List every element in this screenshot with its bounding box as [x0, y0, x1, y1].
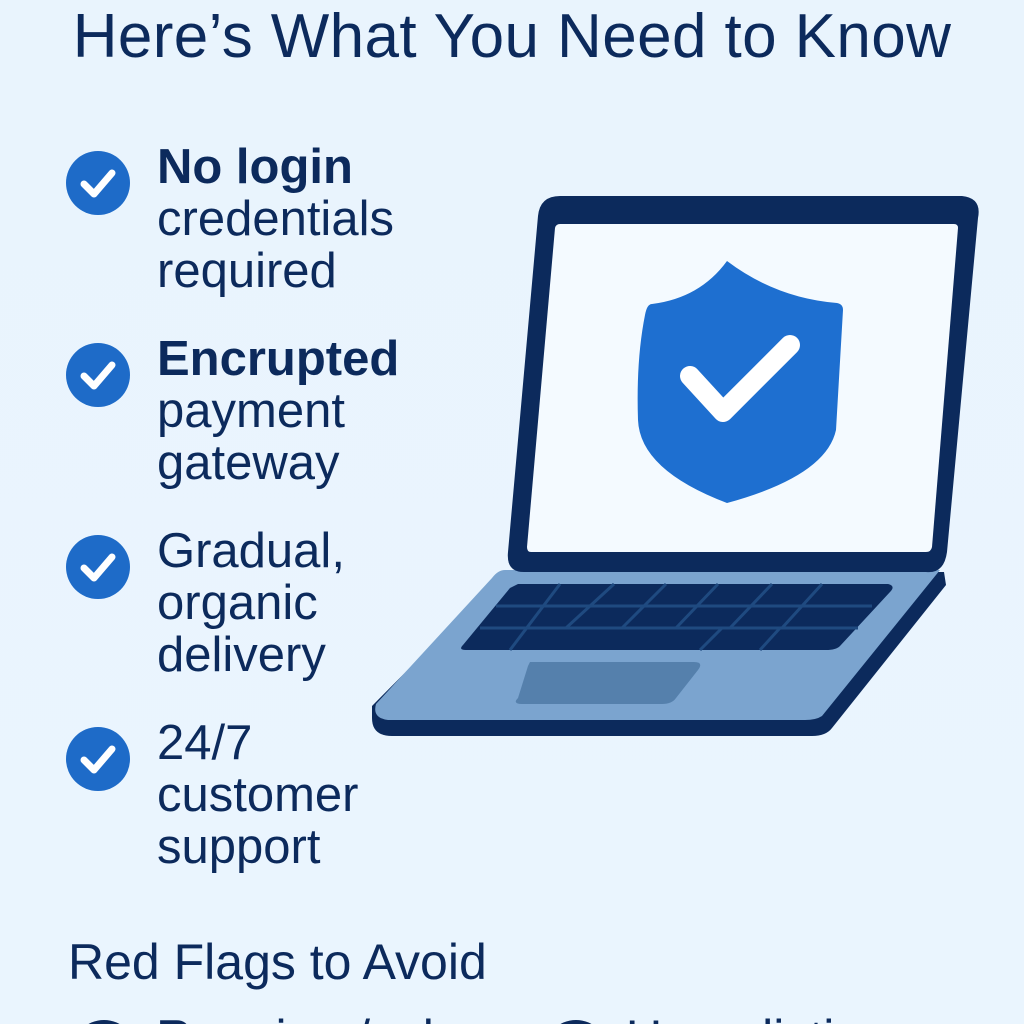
text: customer: [157, 768, 359, 822]
icon: shield with check: [638, 261, 843, 503]
trackpad: [516, 662, 700, 704]
text: required: [157, 244, 337, 298]
text: [157, 716, 359, 874]
text: Gradual,: [157, 524, 345, 578]
text: support: [157, 820, 320, 874]
text: credentials: [157, 192, 394, 246]
icon: check circle: [66, 343, 130, 407]
text: delivery: [157, 628, 326, 682]
item: no login: [66, 140, 394, 298]
laptop screen: [508, 196, 979, 572]
text: [157, 140, 394, 298]
item: encrypted: [66, 332, 399, 490]
title: Here’s What You Need to Know: [73, 2, 951, 71]
icon: check circle: [66, 535, 130, 599]
text: [157, 524, 345, 682]
icon: check circle: [66, 727, 130, 791]
icon: check circle: [66, 151, 130, 215]
text: organic: [157, 576, 318, 630]
text: No login: [157, 140, 353, 194]
red flags row (cut off): [88, 1010, 859, 1024]
item: support: [66, 716, 359, 874]
text: 24/7: [157, 716, 252, 770]
laptop base: [372, 570, 946, 736]
text: gateway: [157, 436, 340, 490]
text: [157, 332, 399, 490]
text: payment: [157, 384, 345, 438]
text: Encrupted: [157, 332, 399, 386]
item: gradual: [66, 524, 345, 682]
heading: red flags: Red Flags to Avoid: [68, 934, 487, 990]
